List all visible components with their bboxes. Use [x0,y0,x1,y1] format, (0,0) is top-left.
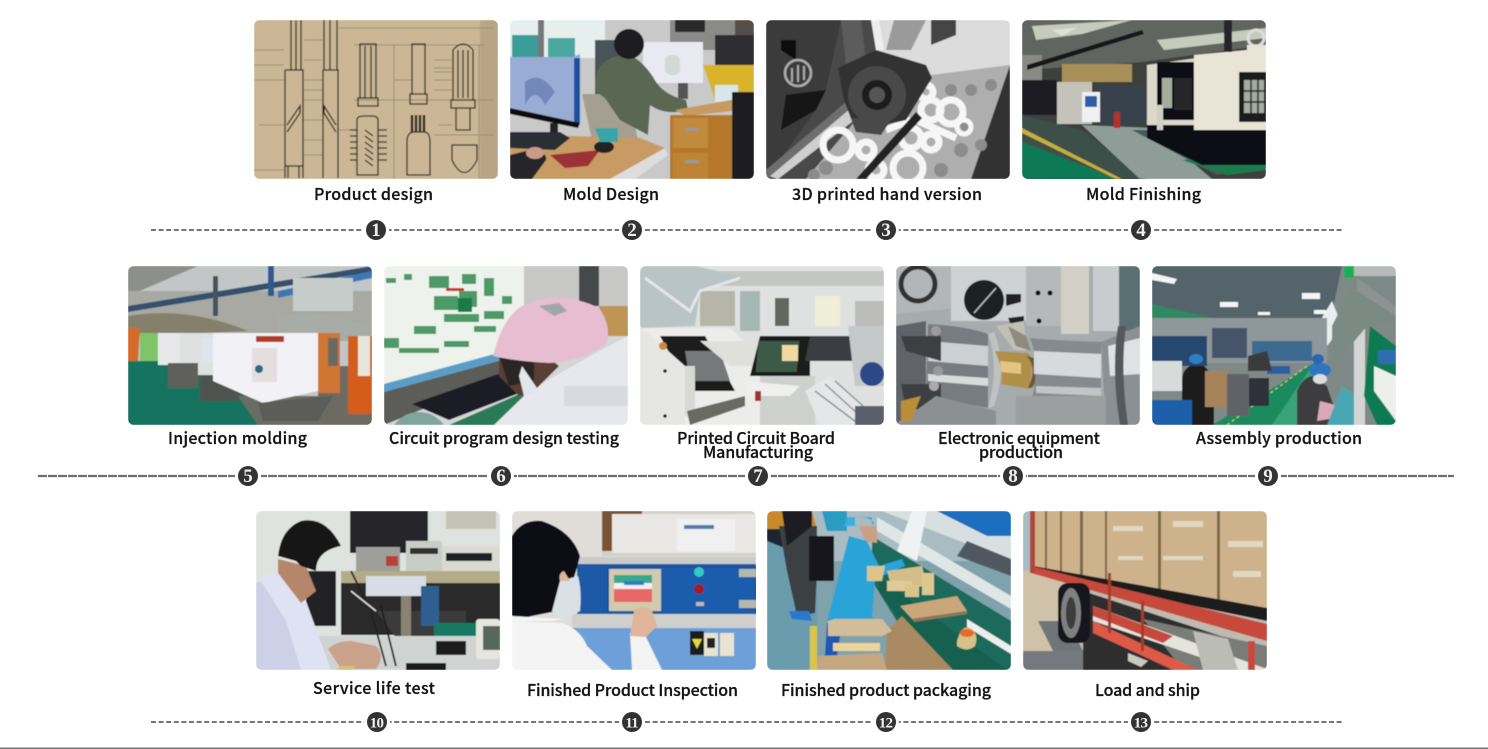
photo: CNC machine workshop [1022,20,1266,180]
label: 3D printed hand version [792,181,982,205]
step number 8 [1000,463,1026,489]
photo: packing line with worker in blue [767,511,1011,670]
bottom rule [0,748,1488,749]
step number 1: 1 [371,220,381,241]
label: Service life test [313,675,436,699]
dashed timeline: row 3 [151,721,1342,723]
step number 7: 7 [753,466,763,487]
label: Electronic equipment [938,425,1101,449]
step number 3: 3 [881,220,891,241]
label: Product design [314,181,433,205]
label: Printed Circuit Board [677,425,835,449]
step number 10: 10 [370,716,383,732]
step number 5 [235,463,261,489]
step number 11 [619,709,645,735]
label: Load and ship [1095,677,1200,701]
step 9: assembly production [1152,266,1396,489]
step 5: injection molding [128,266,372,489]
step number 13: 13 [1134,716,1147,732]
label: Injection molding [168,425,307,449]
step number 12: 12 [879,716,892,732]
label [677,425,835,463]
step 13: load and ship [1023,511,1267,735]
photo: designer at CAD workstation [510,20,754,179]
step 3: 3D printed hand version [766,20,1010,243]
label: Mold Finishing [1086,181,1201,205]
label: Mold Design [563,181,659,205]
label: Finished Product Inspection [527,677,738,701]
label [938,425,1101,463]
step number 6 [488,463,514,489]
photo: 3D printer head printing rings [766,20,1010,183]
dashed timeline: row 1 [151,229,1342,231]
step 7: printed circuit board manufacturing [640,266,884,489]
label: Finished product packaging [781,677,991,701]
photo: assembly line workers [1152,266,1396,425]
photo: engineer viewing PCB layout [384,266,628,425]
step number 8: 8 [1008,466,1018,487]
step 4: mold finishing [1022,20,1266,243]
photo: row of injection molding machines [128,266,372,425]
step number 9 [1255,463,1281,489]
label: Assembly production [1196,425,1362,449]
step 8: electronic equipment production [896,266,1140,489]
step 6: circuit program design testing [384,266,628,489]
step number 5: 5 [243,466,253,487]
photo: SMT placement machine [640,266,884,425]
step number 7 [745,463,771,489]
step 11: finished product inspection [512,511,756,735]
step number 13 [1128,709,1154,735]
photo: technical drawings [254,20,498,179]
photo: technician at test bench [256,511,500,670]
step 1: product design [254,20,498,243]
dashed timeline: row 2 [38,475,1454,477]
photo: lathe spindle and brass part [896,266,1140,425]
step number 6: 6 [496,466,506,487]
step number 4 [1128,217,1154,243]
label: Manufacturing [703,439,813,463]
step number 1 [363,217,389,243]
photo: truck loaded with cartons [1023,511,1267,670]
step number 11: 11 [625,716,638,732]
step 12: finished product packaging [767,511,1011,735]
step number 4: 4 [1136,220,1146,241]
step number 2 [619,217,645,243]
label: Circuit program design testing [389,425,619,449]
step number 12 [873,709,899,735]
step number 2: 2 [627,220,637,241]
label: production [979,439,1063,463]
step number 9: 9 [1263,466,1273,487]
step 10: service life test [256,511,500,735]
photo: inspector at test chamber touchscreen [512,511,756,670]
step number 10 [364,709,390,735]
step number 3 [873,217,899,243]
step 2: mold design [510,20,754,243]
